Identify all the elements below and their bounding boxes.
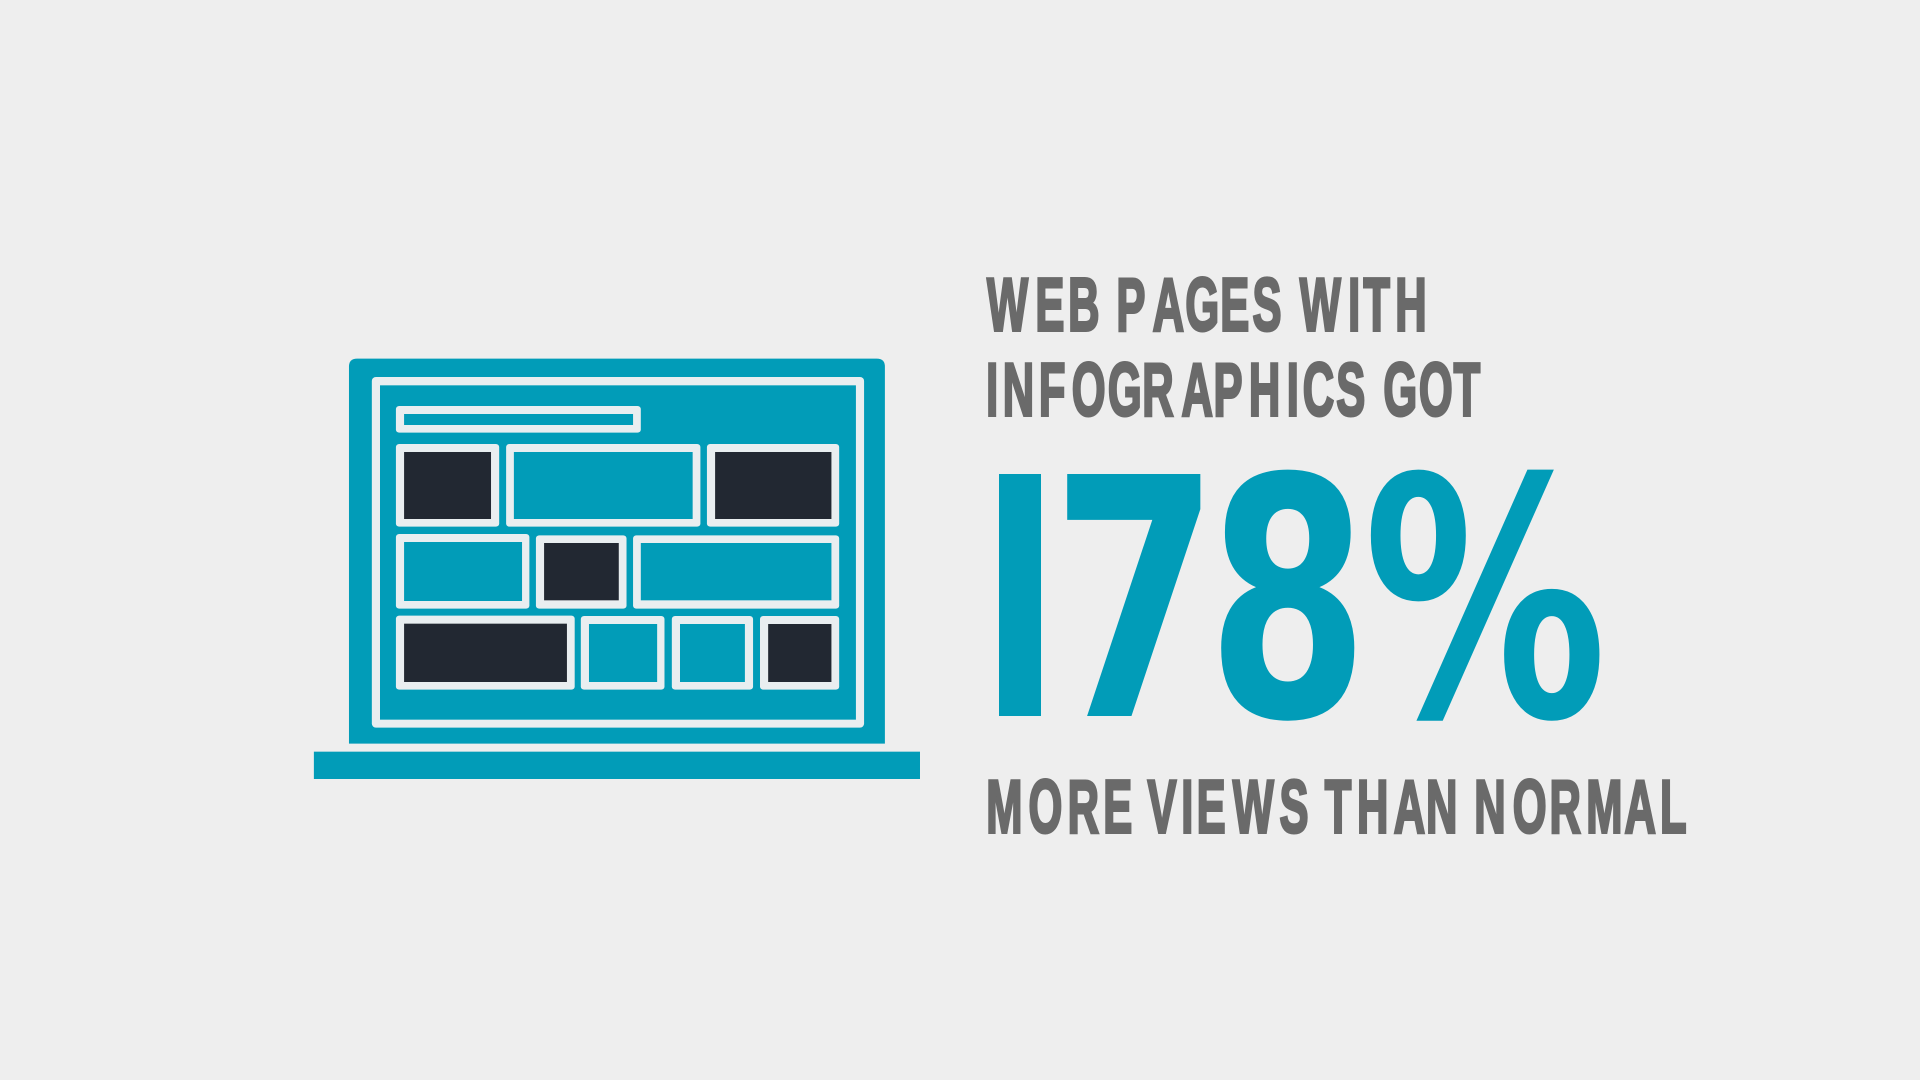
closing line: NORMAL xyxy=(1474,765,1687,848)
heading line 1: WEB xyxy=(987,263,1100,346)
big statistic: 178%: 7 xyxy=(1051,408,1220,795)
laptop screen frame xyxy=(372,377,864,728)
laptop body xyxy=(349,359,885,744)
web page title bar xyxy=(396,406,641,433)
closing line: THAN xyxy=(1325,765,1457,848)
closing line: VIEWS xyxy=(1147,765,1308,848)
web page row 2 xyxy=(396,534,839,609)
big statistic: 178% xyxy=(999,470,1600,721)
closing line: MORE xyxy=(986,765,1132,848)
laptop screen xyxy=(380,385,856,720)
heading line 1: WITH xyxy=(1300,263,1427,346)
infographic canvas xyxy=(314,276,1686,834)
heading line 2: GOT xyxy=(1383,348,1480,431)
web page row 3 xyxy=(396,616,839,690)
big statistic: 178%: 1 xyxy=(918,408,1114,795)
laptop base xyxy=(314,752,920,779)
heading line 1: PAGES xyxy=(1116,263,1282,346)
web page row 1 xyxy=(396,444,839,527)
icon: laptop showing a web page layout xyxy=(314,359,920,779)
big statistic: 178%: % xyxy=(1363,408,1607,795)
heading line 2: INFOGRAPHICS xyxy=(986,348,1365,431)
big statistic: 178%: 8 xyxy=(1207,408,1369,795)
